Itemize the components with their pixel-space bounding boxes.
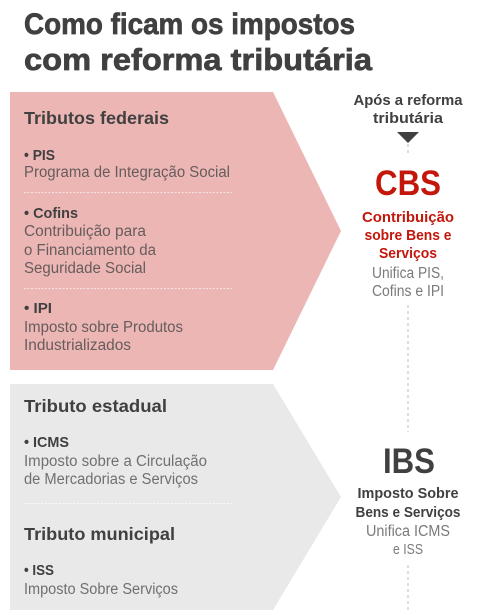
text: PIS: • PIS	[24, 147, 55, 164]
text: PIS: Programa de Integração Social	[24, 164, 230, 181]
text: IPI: • IPI	[24, 300, 52, 317]
title: Como ficam os impostos	[24, 8, 355, 41]
heading: Tributo estadual: Tributo estadual	[24, 396, 167, 416]
block: IBS: Imposto Sobre	[358, 485, 458, 502]
text: Cofins: o Financiamento da	[24, 242, 156, 259]
heading: after the reform	[354, 93, 463, 127]
block: CBS: Serviços	[379, 245, 437, 262]
block: IBS: Unifica ICMS	[366, 523, 450, 540]
text: ICMS: Imposto sobre a Circulação	[24, 453, 207, 470]
text: ISS	[24, 562, 178, 598]
title: com reforma tributária	[24, 43, 373, 77]
heading: Tributos federais: Tributos federais	[24, 108, 169, 128]
panel: federal taxes	[10, 92, 341, 370]
text: IPI	[24, 300, 183, 354]
panel: state and municipal taxes	[10, 384, 341, 610]
text: ISS: • ISS	[24, 562, 54, 579]
text: ICMS: de Mercadorias e Serviços	[24, 471, 198, 488]
text: Cofins	[24, 205, 156, 277]
block: CBS: Contribuição	[362, 209, 454, 226]
block: IBS: IBS	[383, 442, 435, 481]
text: PIS	[24, 147, 230, 181]
block: CBS: Cofins e IPI	[372, 283, 444, 300]
text: Cofins: Seguridade Social	[24, 260, 146, 277]
heading: Tributo municipal: Tributo municipal	[24, 524, 175, 544]
block: CBS: sobre Bens e	[364, 227, 452, 244]
text: IPI: Imposto sobre Produtos	[24, 319, 183, 336]
text: IPI: Industrializados	[24, 337, 131, 354]
icon: down arrow	[397, 132, 419, 143]
heading: after the reform: Após a reforma	[354, 93, 463, 109]
text: ICMS: • ICMS	[24, 434, 69, 451]
block: CBS: CBS	[375, 164, 441, 203]
block: IBS: Bens e Serviços	[356, 504, 460, 521]
text: ICMS	[24, 434, 207, 488]
block: IBS	[356, 442, 460, 558]
block: CBS	[362, 164, 454, 300]
block: IBS: e ISS	[393, 542, 423, 558]
text: Cofins: • Cofins	[24, 205, 78, 222]
text: ISS: Imposto Sobre Serviços	[24, 581, 178, 598]
block: CBS: Unifica PIS,	[372, 265, 444, 282]
title	[24, 8, 373, 77]
heading: after the reform: tributária	[373, 111, 444, 127]
text: Cofins: Contribuição para	[24, 223, 146, 240]
